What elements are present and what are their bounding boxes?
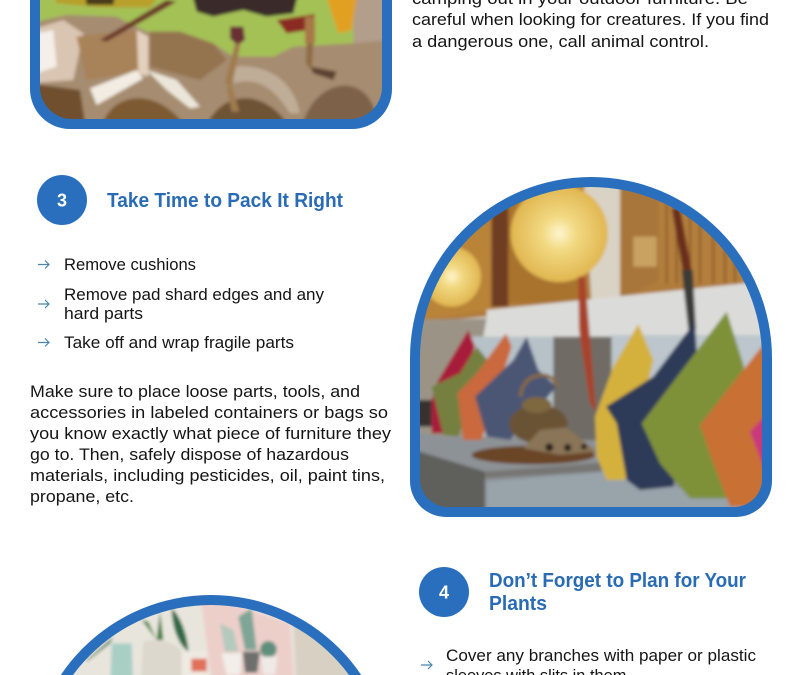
text block: packing paragraph: accessories in labeled containers or bags so [30, 404, 388, 422]
text block: creature warning [412, 0, 769, 51]
checklist: step 3 [38, 256, 325, 352]
text block: packing paragraph: propane, etc. [30, 488, 134, 506]
heading: step 3: Take Time to Pack It Right [107, 190, 343, 212]
photo: wasp on nest [27, 0, 393, 137]
list item: cover branches: Cover any branches with paper or plastic [446, 647, 756, 665]
text block: creature warning: careful when looking for creatures. If you find [412, 11, 769, 29]
list item: remove cushions: Remove cushions [64, 256, 196, 274]
list item: remove pad shard edges: hard parts [64, 305, 143, 323]
heading: step 4: Plants [489, 593, 547, 615]
text block: packing paragraph: Make sure to place loose parts, tools, and [30, 383, 360, 401]
text block: creature warning: a dangerous one, call animal control. [412, 33, 709, 51]
step 4 number badge: 4 [439, 582, 449, 602]
list item: remove pad shard edges [38, 286, 325, 323]
step 3 number badge [37, 175, 87, 225]
list item: take off fragile parts: Take off and wrap fragile parts [64, 334, 294, 352]
heading: step 4: Don’t Forget to Plan for Your [489, 570, 746, 592]
text block: packing paragraph: go to. Then, safely dispose of hazardous [30, 446, 349, 464]
step 3 number badge: 3 [57, 190, 67, 210]
step 4 number badge [419, 567, 469, 617]
photo: cushions on bench [403, 173, 777, 527]
text block: packing paragraph [30, 383, 392, 506]
list item: cover branches [421, 647, 756, 675]
text block: packing paragraph: you know exactly what piece of furniture they [30, 425, 392, 443]
list item: remove pad shard edges: Remove pad shard edges and any [64, 286, 325, 304]
heading: step 4 [489, 570, 746, 615]
text block: packing paragraph: materials, including pesticides, oil, paint tins, [30, 467, 385, 485]
photo: plants and cactus art [60, 595, 362, 675]
